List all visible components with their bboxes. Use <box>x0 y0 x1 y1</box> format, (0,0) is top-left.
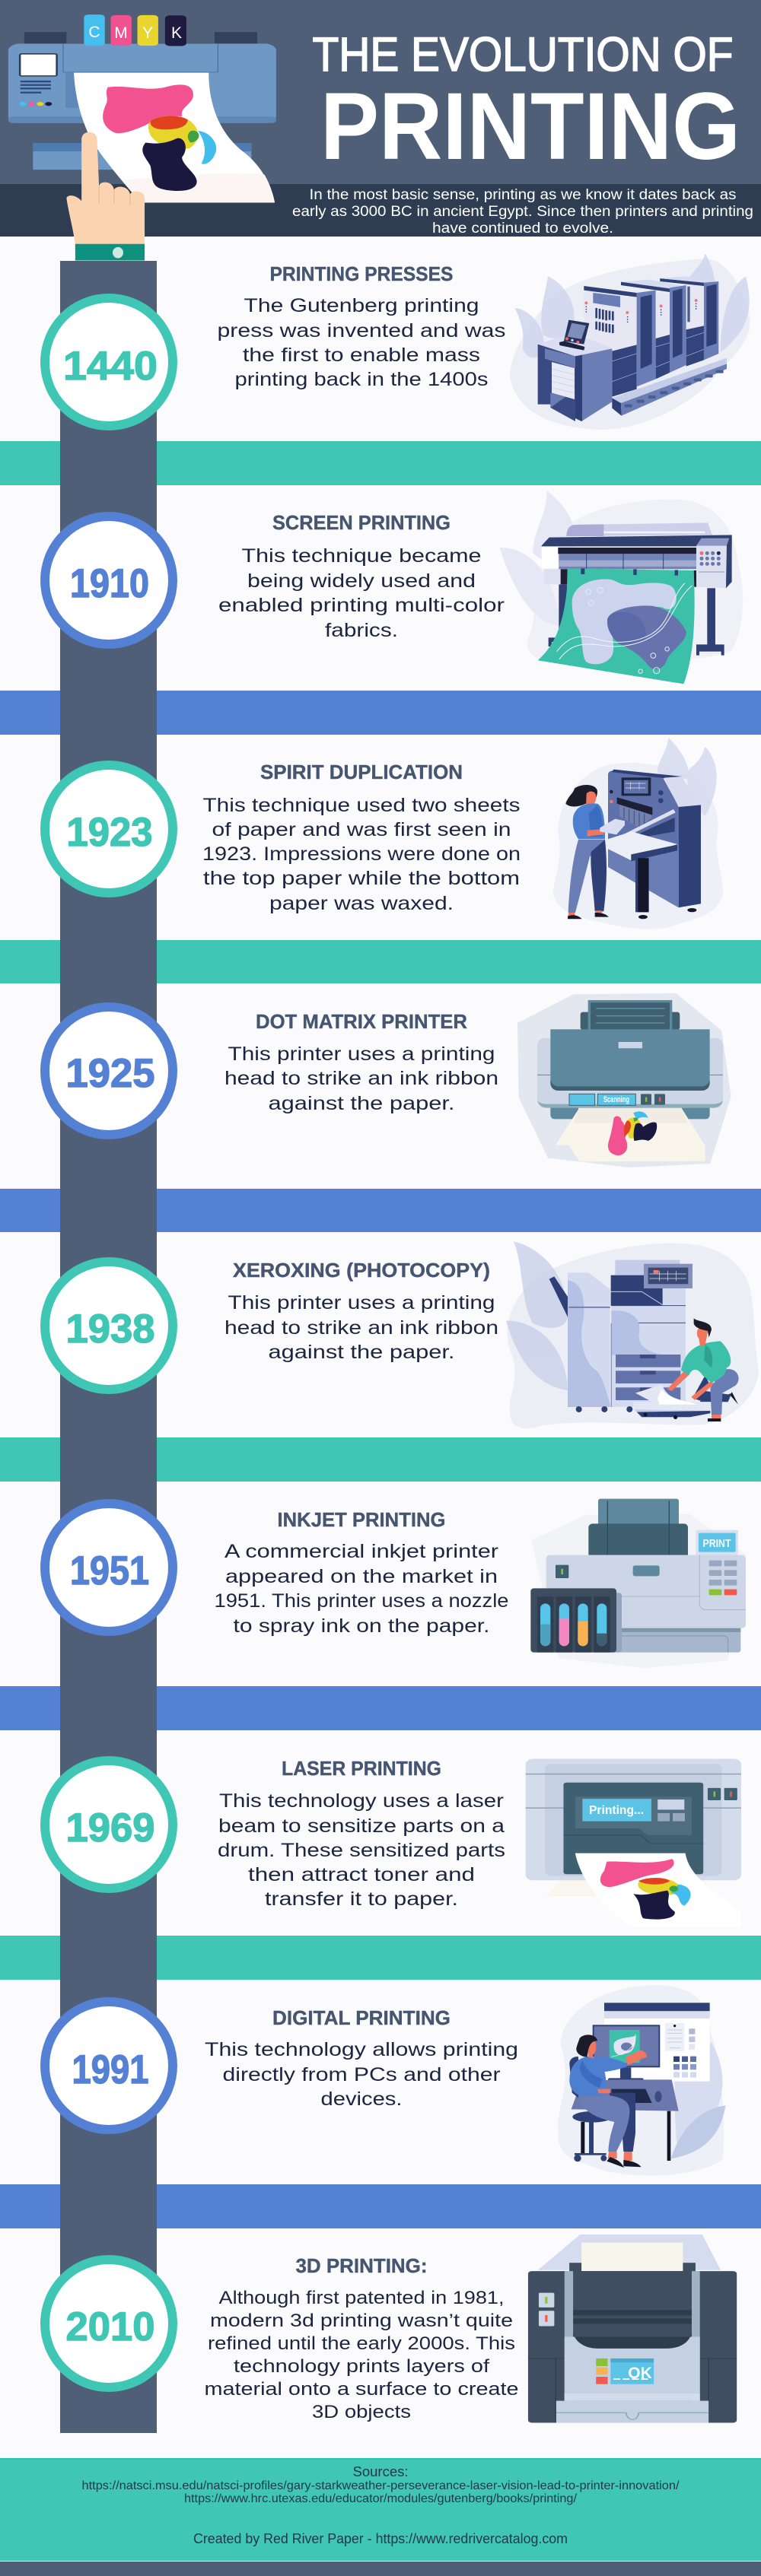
footer: sources and credit <box>0 2458 761 2576</box>
body text: paper was waxed. <box>269 893 454 914</box>
body text: head to strike an ink ribbon <box>224 1068 498 1089</box>
body text: appeared on the market in <box>225 1566 498 1587</box>
body text: This printer uses a printing <box>228 1043 495 1065</box>
intro text: early as 3000 BC in ancient Egypt. Since then printers and printing <box>292 204 753 220</box>
body text: modern 3d printing wasn’t quite <box>210 2311 513 2331</box>
heading: PRINTING PRESSES <box>269 262 454 285</box>
icon: pointing hand <box>66 132 145 261</box>
body text <box>224 1292 498 1363</box>
body text: enabled printing multi-color <box>218 595 505 616</box>
icon: cmyk labels <box>88 24 182 42</box>
heading: LASER PRINTING <box>282 1757 441 1780</box>
body text: This printer uses a printing <box>228 1292 495 1313</box>
body text <box>218 545 505 641</box>
title <box>312 28 740 179</box>
year badge 1910 <box>45 516 173 644</box>
body text: being widely used and <box>247 570 476 592</box>
year badge 1925 <box>45 1007 173 1135</box>
body text <box>218 1790 505 1910</box>
illustration: woman at paper cutter <box>553 738 723 929</box>
label: ok: OK <box>628 2365 652 2382</box>
year badge 1991: 1991 <box>72 2047 149 2092</box>
body text: 3D objects <box>312 2402 411 2422</box>
label: print: PRINT <box>703 1537 731 1550</box>
heading: 3D PRINTING: <box>295 2254 428 2277</box>
year badge 2010 <box>45 2260 173 2387</box>
panel: 3d printing <box>45 2235 737 2423</box>
year badge 1969: 1969 <box>65 1806 155 1850</box>
timeline sleeve bar <box>60 261 157 2433</box>
body text: directly from PCs and other <box>222 2064 501 2085</box>
body text: fabrics. <box>325 620 398 641</box>
body text <box>205 2039 518 2110</box>
heading: DIGITAL PRINTING <box>272 2006 451 2029</box>
body text: against the paper. <box>268 1093 455 1114</box>
body text: transfer it to paper. <box>265 1888 458 1910</box>
footer: sources and credit: https://natsci.msu.edu/natsci-profiles/gary-starkweather-perseverance-laser-vision-lead-to-printer-innovation/ <box>82 2479 680 2492</box>
year badge 1951: 1951 <box>70 1548 149 1593</box>
label: scanning: Scanning <box>603 1095 629 1104</box>
body text: then attract toner and <box>248 1864 475 1885</box>
intro text <box>292 187 753 237</box>
heading: SPIRIT DUPLICATION <box>260 761 463 783</box>
body text: 1951. This printer uses a nozzle <box>215 1590 508 1612</box>
year badge 1951 <box>45 1504 173 1631</box>
year badge 1938 <box>45 1262 173 1390</box>
body text <box>215 1541 508 1637</box>
panel: printing presses <box>45 253 750 430</box>
year badge 1925: 1925 <box>65 1051 155 1096</box>
illustration: ink tank printer <box>530 1499 746 1668</box>
year badge 2010: 2010 <box>65 2304 155 2349</box>
illustration: 3d printer <box>528 2235 737 2423</box>
body text: This technology uses a laser <box>219 1790 504 1812</box>
footer: sources and credit: https://www.hrc.utexas.edu/educator/modules/gutenberg/books/printing/ <box>184 2492 578 2505</box>
body text: refined until the early 2000s. This <box>208 2333 515 2354</box>
heading: INKJET PRINTING <box>277 1508 446 1531</box>
body text: the first to enable mass <box>243 345 480 366</box>
heading: SCREEN PRINTING <box>272 511 451 534</box>
body text: press was invented and was <box>218 320 505 341</box>
illustration: man at photocopier <box>506 1241 759 1428</box>
body text: beam to sensitize parts on a <box>218 1815 505 1837</box>
icon: large format printer <box>8 14 276 202</box>
illustration: woman at computer <box>558 1985 725 2176</box>
body text: the top paper while the bottom <box>203 868 520 889</box>
body text <box>204 2288 519 2422</box>
icon: cmyk labels: C <box>88 24 100 41</box>
body text: The Gutenberg printing <box>244 295 479 316</box>
body text: material onto a surface to create <box>204 2379 519 2400</box>
illustration: printing press <box>510 253 750 430</box>
header panel <box>0 0 761 237</box>
intro text: In the most basic sense, printing as we know it dates back as <box>309 187 737 203</box>
panel: xeroxing <box>45 1241 759 1428</box>
year badge 1923: 1923 <box>67 810 152 855</box>
body text: to spray ink on the paper. <box>233 1615 490 1637</box>
illustration: laser printer printing <box>526 1758 741 1926</box>
heading: DOT MATRIX PRINTER <box>256 1010 467 1033</box>
body text: This technique used two sheets <box>202 795 521 816</box>
year badge 1938: 1938 <box>65 1307 155 1352</box>
year badge 1923 <box>45 765 173 893</box>
panel: laser printing <box>45 1757 741 1926</box>
panel: dot matrix printer <box>45 993 731 1167</box>
panel: inkjet printing <box>45 1499 746 1668</box>
body text: Although first patented in 1981, <box>219 2288 504 2308</box>
icon: cmyk labels: M <box>114 24 128 42</box>
panel: digital printing <box>45 1985 725 2176</box>
year badge 1910: 1910 <box>70 561 149 606</box>
footer: sources and credit: Sources: <box>353 2464 408 2479</box>
section divider bands <box>0 441 761 2228</box>
intro text: have continued to evolve. <box>432 221 613 237</box>
year badge 1969 <box>45 1761 173 1888</box>
footer: sources and credit: Created by Red River Paper - https://www.redrivercatalog.com <box>193 2531 568 2546</box>
panel: spirit duplication <box>45 738 723 929</box>
year badge 1440: 1440 <box>63 344 158 389</box>
label: printing status: Printing... <box>589 1804 644 1817</box>
icon: cmyk labels: Y <box>142 24 153 42</box>
body text: 1923. Impressions were done on <box>202 843 521 865</box>
icon: cmyk labels: K <box>171 24 182 42</box>
body text: devices. <box>321 2088 402 2110</box>
body text: This technology allows printing <box>205 2039 518 2060</box>
year badge 1440 <box>45 298 173 426</box>
body text: of paper and was first seen in <box>212 819 511 840</box>
body text <box>224 1043 498 1114</box>
body text <box>218 295 505 390</box>
panel: screen printing <box>45 491 743 684</box>
body text <box>202 795 521 914</box>
illustration: wide format fabric printer <box>500 491 743 684</box>
body text: against the paper. <box>268 1342 455 1363</box>
body text: technology prints layers of <box>234 2356 489 2377</box>
illustration: desktop printer scanning <box>517 993 731 1167</box>
heading: XEROXING (PHOTOCOPY) <box>233 1259 490 1282</box>
body text: A commercial inkjet printer <box>224 1541 498 1562</box>
body text: printing back in the 1400s <box>234 369 489 390</box>
body text: drum. These sensitized parts <box>218 1840 505 1861</box>
body text: This technique became <box>242 545 481 567</box>
body text: head to strike an ink ribbon <box>224 1317 498 1339</box>
year badge 1991 <box>45 2002 173 2130</box>
